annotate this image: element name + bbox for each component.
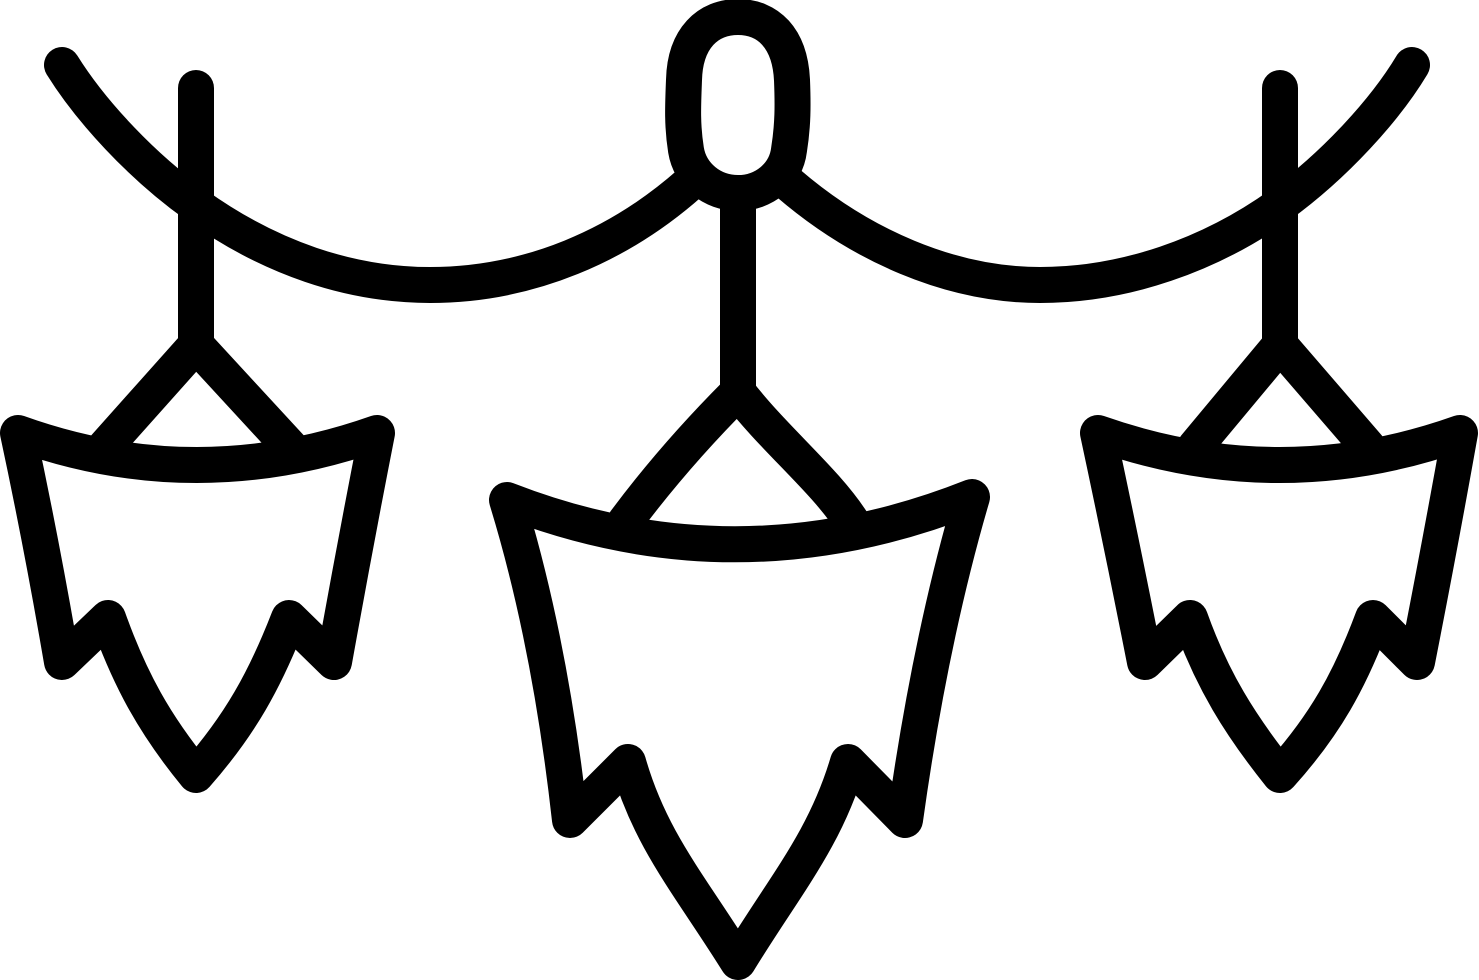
center pennant [507, 497, 972, 962]
right hanger [1195, 88, 1368, 447]
center loop [683, 17, 793, 193]
right pennant [1098, 433, 1460, 775]
left pennant [18, 433, 377, 775]
garland string [62, 65, 1412, 285]
left hanger [105, 88, 290, 447]
center hanger [625, 207, 852, 522]
